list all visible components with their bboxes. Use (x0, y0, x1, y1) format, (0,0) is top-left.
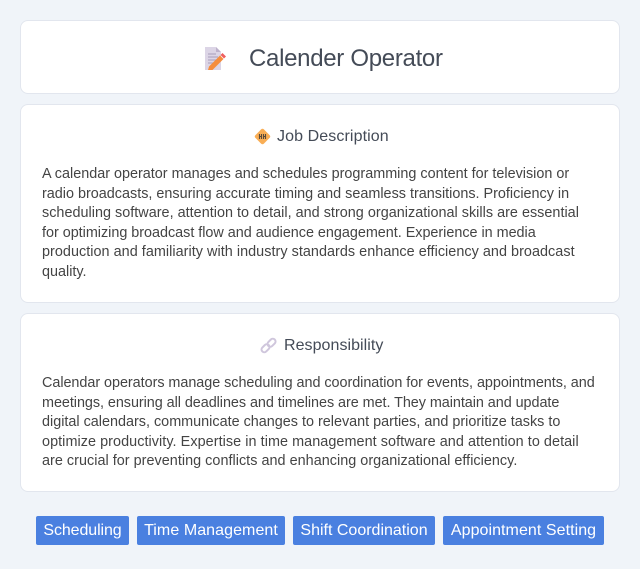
text: responsibility: Calendar operators manage scheduling and coordination for events, appointments, and (42, 375, 595, 391)
text: responsibility (42, 375, 595, 469)
text: job description: scheduling software, attention to detail, and strong organizational skills are essential (42, 205, 579, 221)
tag: time management: Time Management (144, 522, 278, 539)
text: responsibility: optimize productivity. Expertise in time management software and attention to detail (42, 434, 579, 450)
title: Calender Operator (249, 45, 443, 72)
text: responsibility: are crucial for preventing conflicts and enhancing organizational efficiency. (42, 453, 517, 469)
tag: scheduling (36, 516, 129, 545)
panel: job description (20, 104, 620, 303)
tag: appointment setting (443, 516, 604, 545)
tag: appointment setting: Appointment Setting (451, 522, 596, 539)
tag: time management (137, 516, 285, 545)
tag: scheduling: Scheduling (43, 522, 122, 539)
heading: responsibility: Responsibility (284, 337, 383, 354)
icon: document with pencil (205, 47, 226, 70)
text: job description: for optimizing broadcast flow and audience engagement. Experience in media (42, 225, 536, 241)
panel: header (20, 20, 620, 94)
icon: chain link (260, 338, 276, 354)
text: job description: quality. (42, 264, 87, 280)
text: responsibility: digital calendars, communicate changes to relevant parties, and prioritize tasks to (42, 414, 560, 430)
text: job description: A calendar operator manages and schedules programming content for television or (42, 166, 569, 182)
text: job description: production and familiarity with industry standards enhance efficiency and broadcast (42, 244, 575, 260)
text: job description: radio broadcasts, ensuring accurate timing and seamless transitions. Proficiency in (42, 186, 569, 202)
panel: responsibility (20, 313, 620, 492)
icon: orange diamond (254, 128, 270, 144)
tag: shift coordination: Shift Coordination (300, 522, 428, 539)
text: responsibility: meetings, ensuring all deadlines and timelines are met. They maintain and update (42, 395, 559, 411)
text: job description (42, 166, 579, 280)
tag: shift coordination (293, 516, 435, 545)
heading: job description: Job Description (277, 128, 389, 145)
